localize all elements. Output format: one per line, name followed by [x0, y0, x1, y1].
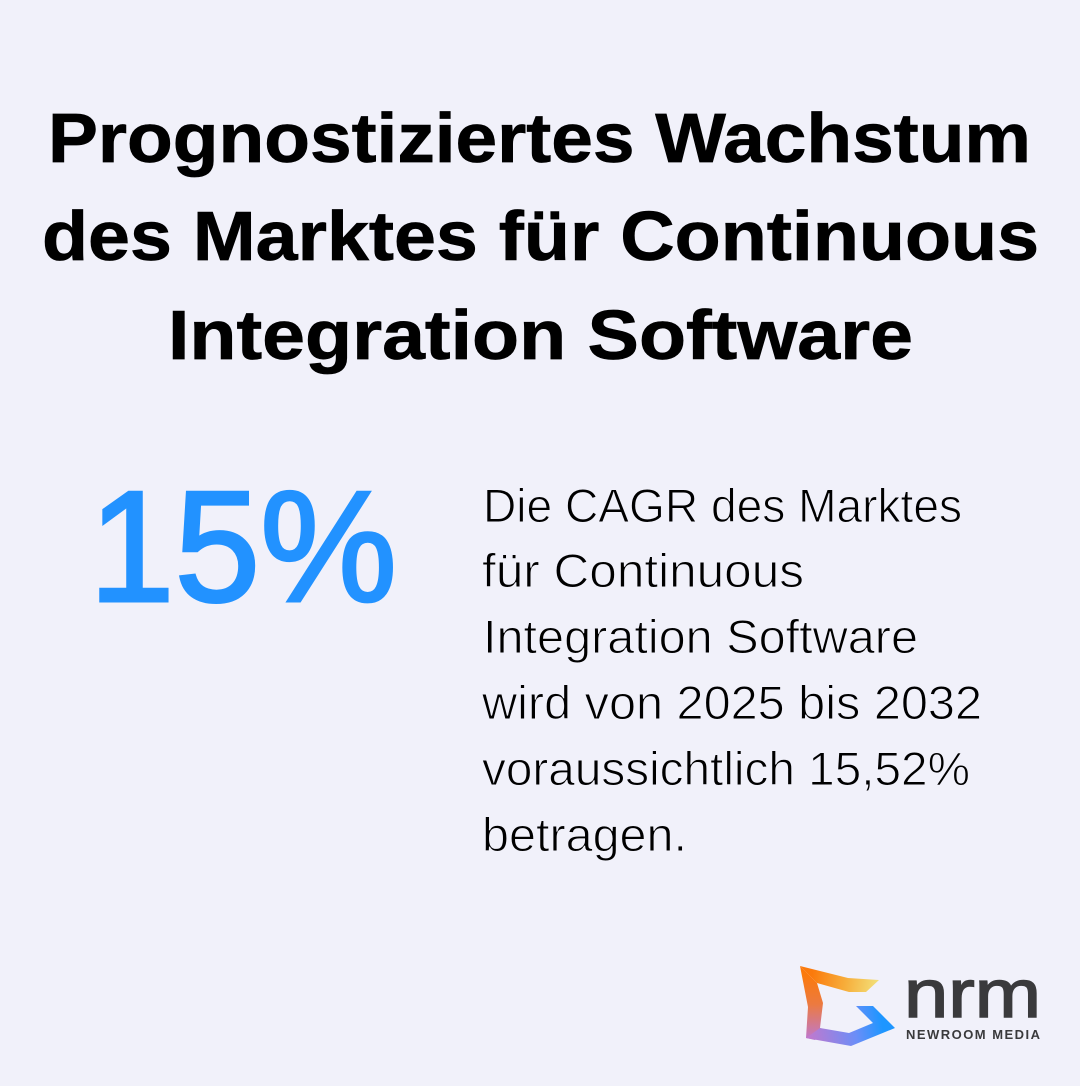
title [42, 99, 1039, 374]
logo tagline: NEWROOM MEDIA [906, 1027, 1041, 1042]
description text: für Continuous [482, 544, 804, 597]
logo wordmark: nrm [904, 956, 1041, 1032]
description text: betragen. [482, 808, 687, 861]
big statistic: 15%: 15% [89, 459, 397, 635]
title: Prognostiziertes Wachstum [48, 99, 1031, 177]
description text [481, 479, 982, 861]
description text: Die CAGR des Marktes [483, 479, 962, 532]
description text: voraussichtlich 15,52% [482, 742, 970, 795]
title: des Marktes für Continuous [42, 197, 1039, 275]
logo: Newroom Media [800, 956, 1041, 1046]
description text: Integration Software [483, 610, 918, 663]
title: Integration Software [168, 296, 913, 374]
description text: wird von 2025 bis 2032 [481, 676, 982, 729]
icon: logo mark [800, 966, 895, 1046]
